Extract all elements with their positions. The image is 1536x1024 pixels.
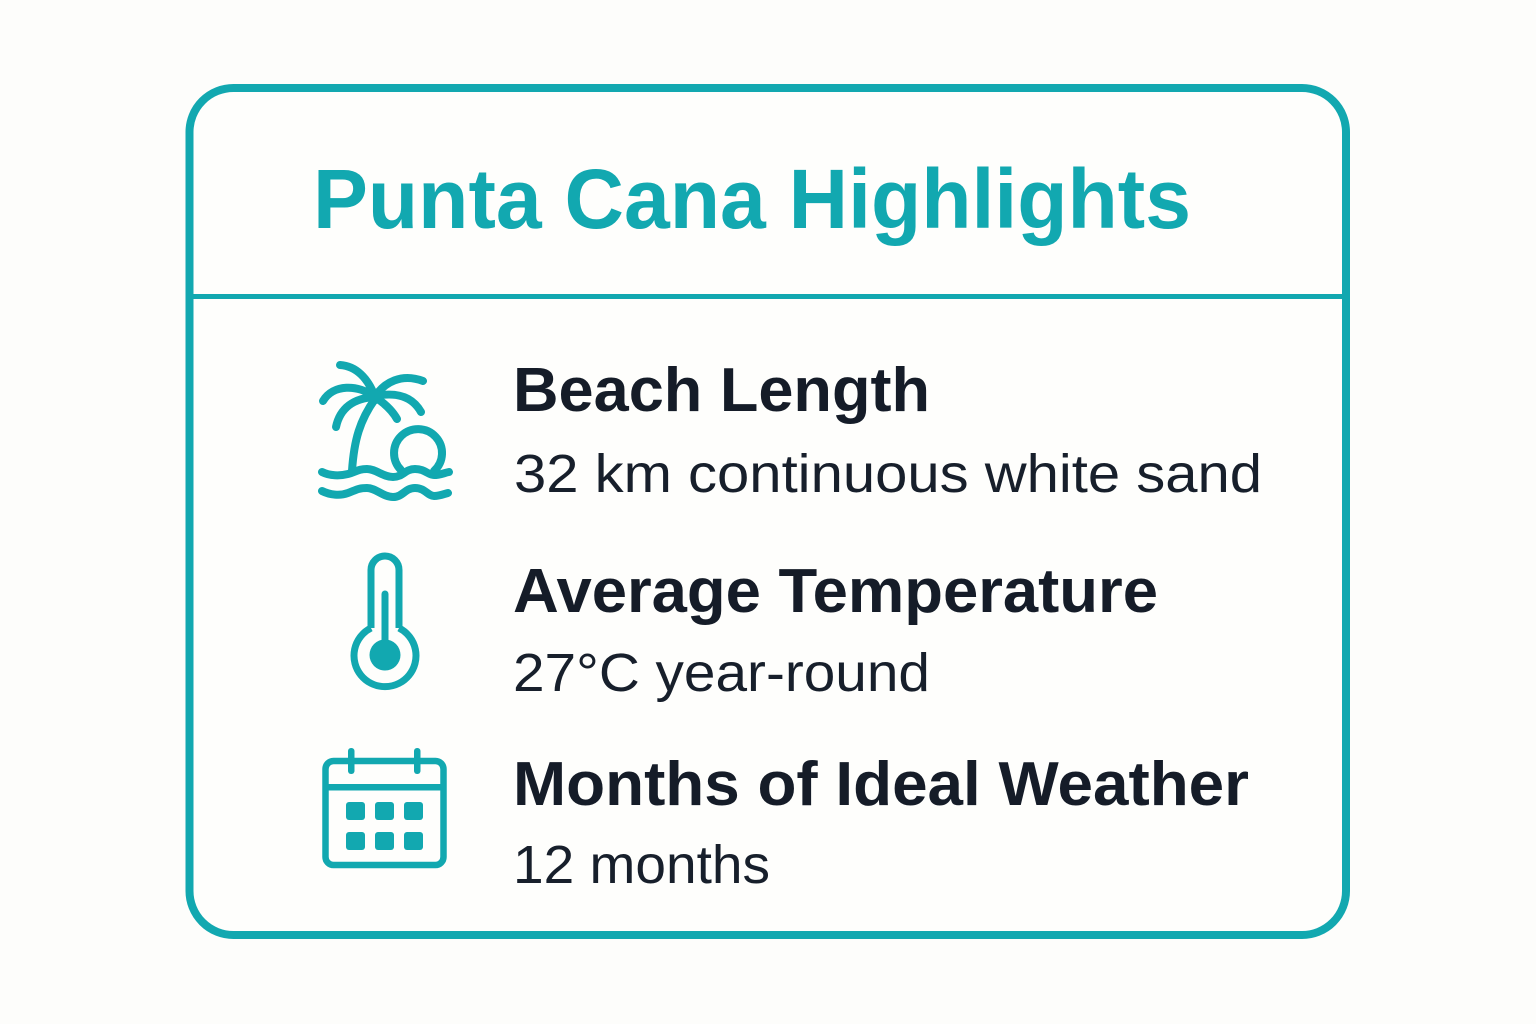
row: beach length (322, 356, 1262, 504)
heading: months of ideal weather: Months of Ideal Weather (513, 750, 1249, 819)
row: months of ideal weather (325, 748, 1249, 895)
value: average temperature: 27°C year-round (513, 643, 930, 703)
panel: highlights card (190, 88, 1346, 935)
title: Punta Cana Highlights (313, 152, 1191, 246)
heading: beach length: Beach Length (513, 356, 930, 425)
row: average temperature (354, 556, 1158, 703)
icon: thermometer (354, 556, 416, 687)
heading: average temperature: Average Temperature (513, 557, 1158, 626)
value: months of ideal weather: 12 months (513, 835, 770, 895)
icon: palm tree with sun and waves (322, 365, 449, 497)
icon: calendar (325, 748, 444, 865)
value: beach length: 32 km continuous white sand (514, 444, 1262, 504)
